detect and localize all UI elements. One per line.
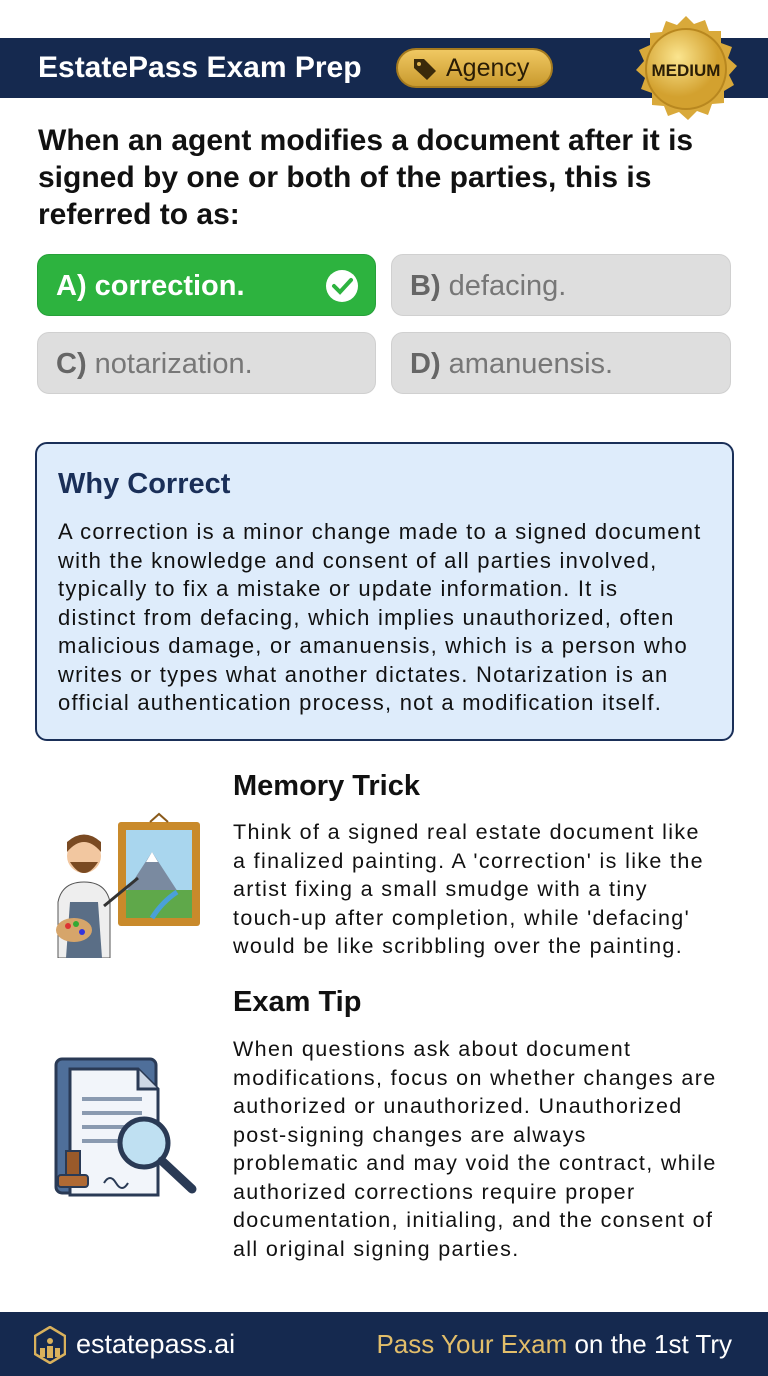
difficulty seal: MEDIUM <box>652 61 720 80</box>
explanation text <box>58 519 702 715</box>
memory trick text <box>233 820 704 958</box>
heading: why correct: Why Correct <box>58 468 230 500</box>
header bar <box>0 38 768 98</box>
question <box>38 124 693 231</box>
footer bar <box>0 1312 768 1376</box>
exam tip text: When questions ask about document <box>233 1037 631 1061</box>
explanation text: malicious damage, or amanuensis, which is a person who <box>58 633 688 658</box>
memory trick text: artist fixing a small smudge with a tiny <box>233 877 648 901</box>
icon: check <box>326 270 358 302</box>
option C: C) notarization. <box>56 348 253 380</box>
option A correct <box>37 254 376 316</box>
explanation text: official authentication process, not a modification itself. <box>58 690 662 715</box>
option D: D) amanuensis. <box>410 348 613 380</box>
icon: painter <box>56 812 200 958</box>
explanation text: typically to fix a mistake or update information. It is <box>58 576 618 601</box>
question: signed by one or both of the parties, this is <box>38 161 651 194</box>
exam tip text: problematic and may void the contract, while <box>233 1151 717 1175</box>
icon: document with magnifier <box>54 1058 196 1196</box>
explanation text: writes or types what another dictates. Notarization is an <box>58 662 669 686</box>
category badge <box>396 48 553 88</box>
difficulty seal <box>636 16 737 120</box>
memory trick text: would be like scribbling over the painting. <box>233 934 683 958</box>
explanation text: A correction is a minor change made to a signed document <box>58 519 702 544</box>
icon: tag <box>414 59 436 80</box>
option B: B) defacing. <box>410 270 566 302</box>
exam tip text: authorized corrections require proper <box>233 1180 636 1204</box>
category badge: Agency <box>446 54 529 82</box>
exam tip text: authorized or unauthorized. Unauthorized <box>233 1094 683 1118</box>
exam tip text <box>233 1037 717 1260</box>
exam tip text: modifications, focus on whether changes are <box>233 1066 717 1090</box>
option D <box>391 332 731 394</box>
panel: why correct <box>35 442 734 741</box>
option A correct: A) correction. <box>56 270 245 302</box>
memory trick text: touch-up after completion, while 'defacing' <box>233 906 690 930</box>
footer tagline: Pass Your Exam on the 1st Try <box>376 1329 732 1359</box>
exam tip text: documentation, initialing, and the consent of <box>233 1208 713 1232</box>
footer logo <box>34 1326 235 1364</box>
heading: memory trick: Memory Trick <box>233 770 420 802</box>
explanation text: with the knowledge and consent of all parties involved, <box>58 548 658 572</box>
heading: exam tip: Exam Tip <box>233 986 361 1018</box>
header title: EstatePass Exam Prep <box>38 51 362 84</box>
question: referred to as: <box>38 198 240 231</box>
option C <box>37 332 376 394</box>
exam tip text: post-signing changes are always <box>233 1122 587 1146</box>
exam tip text: all original signing parties. <box>233 1236 520 1260</box>
option B <box>391 254 731 316</box>
explanation text: distinct from defacing, which implies unauthorized, often <box>58 604 675 630</box>
memory trick text: a finalized painting. A 'correction' is like the <box>233 848 704 872</box>
footer logo: estatepass.ai <box>76 1329 235 1359</box>
question: When an agent modifies a document after it is <box>38 124 693 157</box>
memory trick text: Think of a signed real estate document like <box>233 820 700 844</box>
